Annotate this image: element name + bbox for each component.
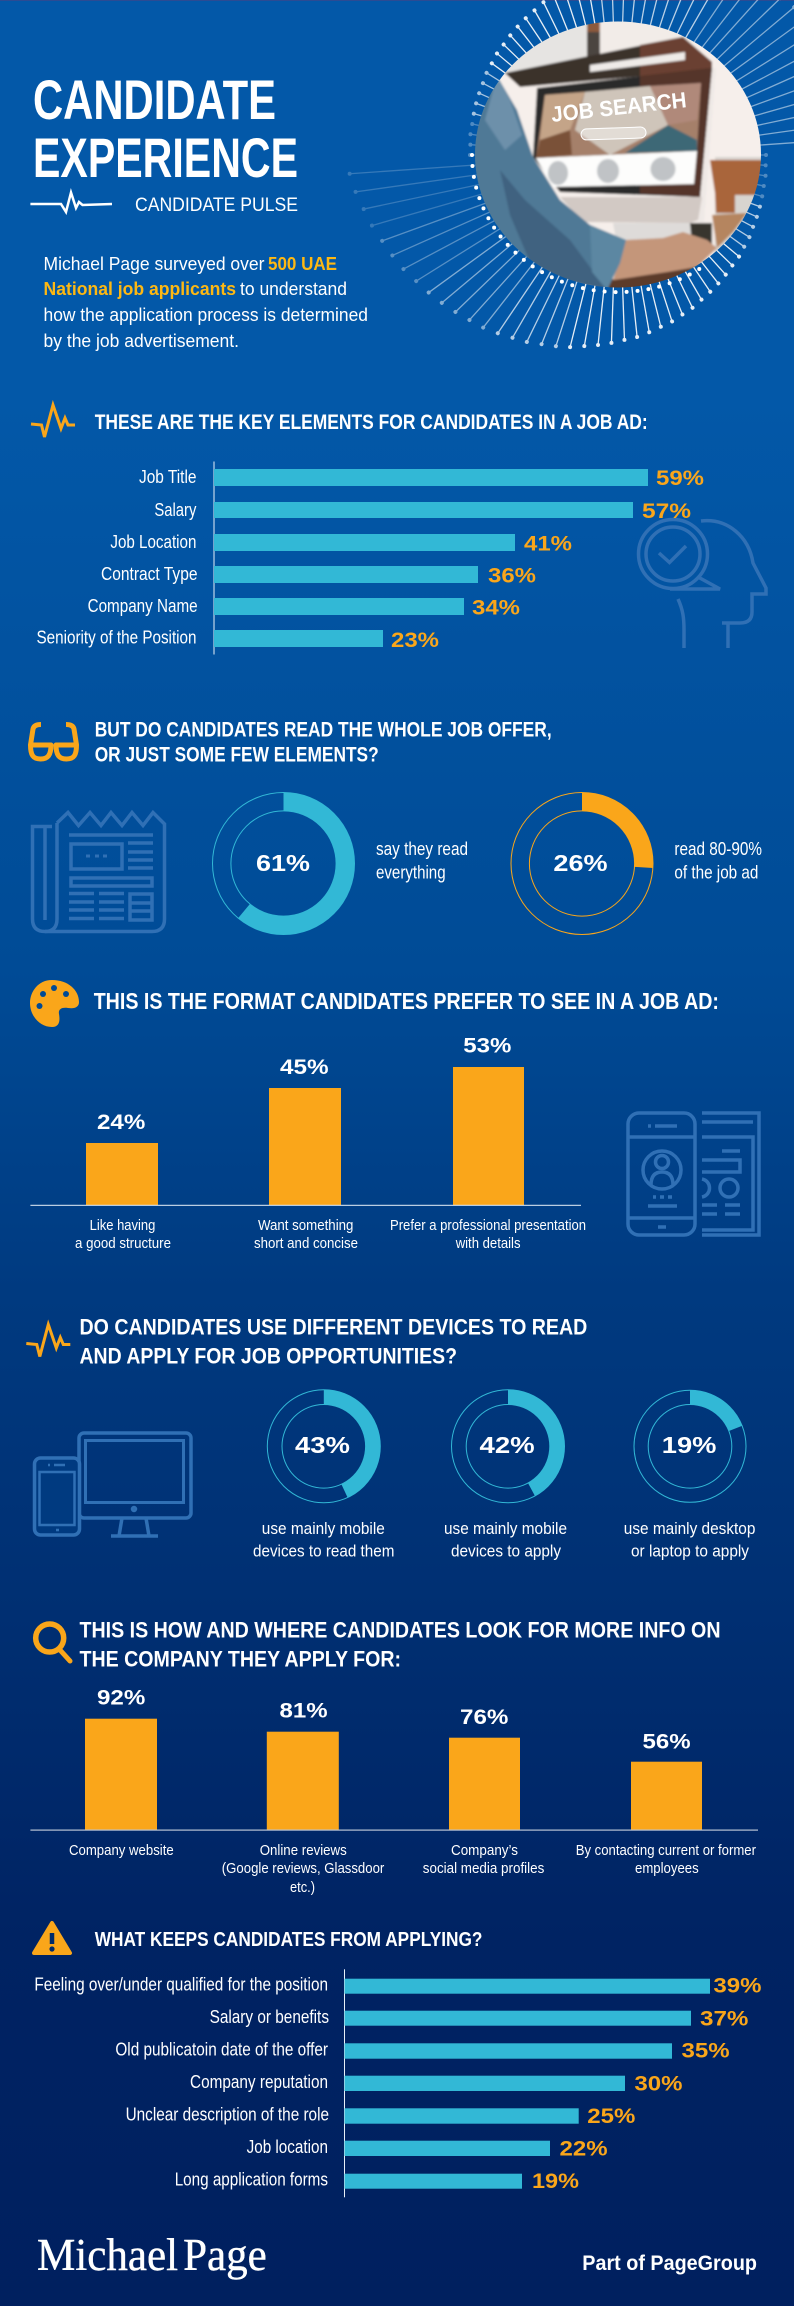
bar labels [75,1217,586,1252]
heading [80,1617,720,1672]
donut: 42%: 42% [480,1432,535,1458]
donut captions: devices to apply [451,1542,561,1561]
photo: job search on a monitor: JOB SEARCH [550,87,688,127]
donut captions [253,1519,755,1561]
intro paragraph: by the job advertisement. [44,330,239,351]
icon: pulse [26,1324,70,1356]
donut captions: use mainly mobile [262,1519,385,1538]
icon: pulse [31,405,75,437]
donut: 43%: 43% [295,1432,350,1458]
icon: glasses [30,724,76,759]
donut caption: 61% [376,839,468,882]
intro paragraph: 500 UAE [268,253,337,274]
panel: devices [26,1314,755,1561]
bar labels: Salary [154,500,196,520]
bar labels: with details [455,1235,520,1252]
heading: BUT DO CANDIDATES READ THE WHOLE JOB OFFER, [95,718,552,741]
bar values: 56% [642,1730,691,1753]
icon: head with magnifier [638,520,766,648]
bar values [532,1975,762,2193]
bar chart [344,1979,710,2189]
icon: phone and document [628,1113,759,1235]
bar labels: Seniority of the Position [36,628,196,648]
bar values: 30% [634,2073,683,2096]
bar labels: social media profiles [423,1860,544,1877]
bar values: 45% [280,1056,329,1079]
donut caption: 26% [674,839,762,882]
donut captions: devices to read them [253,1542,394,1561]
dot ring around photo [472,155,708,292]
bar labels: Prefer a professional presentation [390,1217,586,1234]
bar values [97,1687,691,1753]
panel: header [30,0,794,351]
bar labels: Feeling over/under qualified for the position [34,1975,328,1995]
axis [214,462,215,654]
icon: magnifier [36,1624,70,1661]
bar values: 37% [700,2007,749,2030]
bar labels: etc.) [290,1879,315,1896]
bar labels: employees [635,1860,699,1877]
bar labels: Company’s [451,1842,518,1859]
icon: white pulse line [30,192,112,212]
bar values: 53% [463,1035,512,1058]
heading [95,718,552,766]
bar values: 92% [97,1687,146,1710]
panel: company research [30,1617,758,1896]
bar values: 41% [524,532,572,556]
donut caption: 61%: everything [376,862,446,882]
bar values: 19% [532,2170,579,2193]
donut caption: 26%: of the job ad [674,862,758,882]
icon: palette [30,980,79,1027]
bar labels [34,1975,329,2190]
bar labels: (Google reviews, Glassdoor [222,1860,384,1877]
axis [344,1969,345,2197]
intro paragraph: National job applicants [44,278,236,299]
bar values: 81% [280,1700,328,1723]
heading: AND APPLY FOR JOB OPPORTUNITIES? [80,1343,457,1368]
bar labels: Company Name [88,596,198,616]
bar values: 25% [587,2105,636,2128]
icon: newspaper [32,812,164,932]
bar values: 76% [460,1706,509,1729]
bar labels: Contract Type [101,564,198,584]
donut: 61%: 61% [256,850,310,876]
bar labels: a good structure [75,1235,171,1252]
bar labels: Company reputation [190,2072,328,2092]
panel: barriers to applying [34,1923,762,2197]
bar values: 39% [713,1975,762,1998]
photo: job search on a monitor [475,22,761,288]
bar labels [69,1842,756,1896]
bar chart [30,1719,758,1831]
bar labels: Like having [90,1217,155,1234]
bar values: 59% [656,467,704,490]
donut: 19%: 19% [662,1432,716,1458]
donut: 61% [212,792,354,934]
icon: warning triangle [34,1923,70,1953]
bar chart [214,469,648,647]
donut: 43% [267,1390,380,1503]
heading: THESE ARE THE KEY ELEMENTS FOR CANDIDATES IN A JOB AD: [95,411,648,434]
bar values: 34% [472,596,520,620]
bar values: 36% [488,564,536,588]
bar labels: Online reviews [260,1842,347,1859]
donut caption: 26%: read 80-90% [674,839,762,859]
bar labels: By contacting current or former [576,1842,756,1859]
heading: THE COMPANY THEY APPLY FOR: [80,1647,401,1672]
footer: part of PageGroup: Part of PageGroup [582,2252,757,2275]
bar labels: Job location [247,2137,328,2157]
bar labels: Long application forms [175,2170,328,2190]
donut caption: 61%: say they read [376,839,468,859]
intro paragraph: to understand [240,278,347,299]
bar labels: Unclear description of the role [126,2105,329,2125]
donut: 26% [511,792,653,934]
bar labels: Want something [258,1217,353,1234]
donut captions: use mainly mobile [444,1519,567,1538]
bar chart [30,1067,581,1206]
bar values: 57% [642,500,691,523]
donut: 42% [452,1390,564,1503]
heading: WHAT KEEPS CANDIDATES FROM APPLYING? [95,1929,482,1951]
panel: preferred format [30,980,759,1252]
title [33,68,298,189]
panel: reading the job offer [30,718,762,934]
bar values [97,1035,512,1134]
bar labels: Salary or benefits [210,2007,329,2027]
icon: desktop and phone [34,1433,191,1536]
title: CANDIDATE [33,68,276,131]
intro paragraph [44,253,368,351]
bar labels: Job Location [110,532,196,552]
subtitle: CANDIDATE PULSE [135,195,298,216]
bar values: 23% [391,629,439,652]
bar values [391,467,704,652]
bar labels: short and concise [254,1235,358,1252]
bar values: 35% [682,2039,730,2062]
bar labels: Old publicatoin date of the offer [115,2040,328,2060]
bar values: 24% [97,1111,146,1134]
footer: Michael Page logo: Michael Page [37,2230,267,2280]
heading: THIS IS HOW AND WHERE CANDIDATES LOOK FOR MORE INFO ON [80,1617,720,1642]
radiating lines [350,0,794,347]
bar values: 22% [560,2137,608,2160]
heading [80,1314,587,1368]
bar labels: Company website [69,1842,174,1859]
panel: key elements [31,405,766,654]
donut: 26%: 26% [553,850,608,876]
title: EXPERIENCE [33,126,298,189]
intro paragraph: Michael Page surveyed over [44,253,264,274]
heading: DO CANDIDATES USE DIFFERENT DEVICES TO READ [80,1314,587,1339]
donut captions: use mainly desktop [624,1519,755,1538]
bar labels [36,467,198,648]
donut captions: or laptop to apply [631,1542,749,1561]
bar labels: Job Title [139,467,196,487]
donut: 19% [634,1390,746,1502]
heading: OR JUST SOME FEW ELEMENTS? [95,743,379,766]
intro paragraph: how the application process is determined [44,304,368,325]
